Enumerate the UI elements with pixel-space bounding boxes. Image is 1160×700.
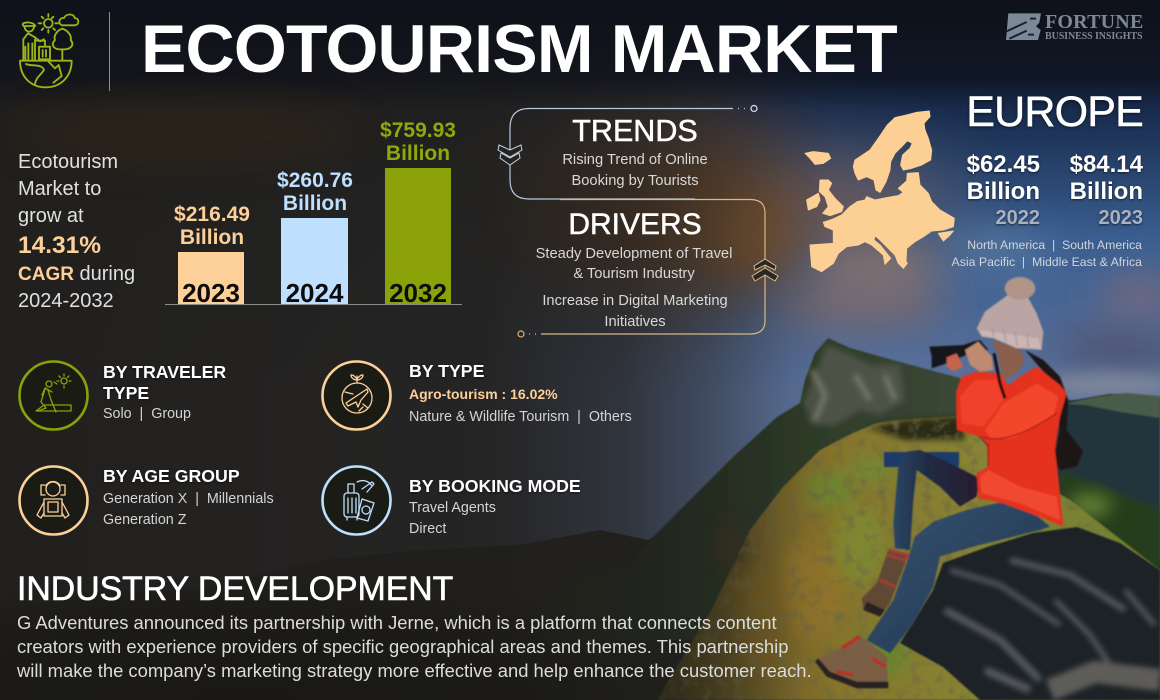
value label 2023 bbox=[174, 203, 250, 248]
drivers text: travel and tourism development: Steady Development of Travel bbox=[536, 246, 732, 262]
logo icon: globe with hiker, tree, sun and cloud bbox=[19, 13, 80, 88]
drivers heading: DRIVERS bbox=[568, 208, 702, 241]
drivers text: digital marketing: Initiatives bbox=[604, 314, 666, 330]
header divider bbox=[108, 12, 110, 91]
chart baseline bbox=[165, 304, 462, 305]
panel: drivers bbox=[517, 198, 779, 338]
value label 2032 bbox=[380, 119, 456, 164]
value 2022 bbox=[966, 151, 1040, 229]
categories: Generation X | Millennials bbox=[103, 491, 274, 507]
heading: INDUSTRY DEVELOPMENT bbox=[17, 570, 453, 608]
value label 2032: Billion bbox=[386, 142, 450, 164]
bar chart bbox=[165, 119, 462, 308]
other regions bbox=[952, 238, 1142, 269]
upper body bbox=[929, 277, 1083, 527]
panel: Europe region bbox=[804, 88, 1144, 272]
CAGR statement: Ecotourism bbox=[18, 151, 118, 173]
categories: Nature & Wildlife Tourism | Others bbox=[409, 409, 632, 425]
drivers text: digital marketing bbox=[542, 293, 728, 330]
value label 2024: Billion bbox=[283, 192, 347, 214]
icon: hiker with sun bbox=[18, 360, 89, 431]
categories: Generation Z bbox=[103, 512, 186, 528]
segment: by type bbox=[321, 360, 632, 431]
bar 2023: 2023 bbox=[182, 278, 240, 308]
CAGR statement: grow at bbox=[18, 205, 84, 227]
CAGR statement: CAGR during bbox=[18, 263, 135, 285]
drivers text: travel and tourism development: & Tourism Industry bbox=[573, 266, 695, 282]
value 2022: Billion bbox=[967, 178, 1040, 205]
value label 2032: $759.93 bbox=[380, 119, 456, 142]
camera strap bbox=[994, 353, 1005, 398]
panel: trends bbox=[498, 104, 758, 200]
logo: Fortune Business Insights bbox=[1006, 11, 1143, 42]
CAGR statement: 2024-2032 bbox=[18, 290, 114, 312]
icon: globe with plane and sprout bbox=[321, 360, 392, 431]
heading: BY AGE GROUP bbox=[103, 466, 240, 486]
value 2022: $62.45 bbox=[967, 151, 1040, 178]
right forested slope bbox=[1060, 470, 1160, 600]
logo subtitle: BUSINESS INSIGHTS bbox=[1045, 31, 1143, 42]
CAGR statement: Market to bbox=[18, 178, 101, 200]
categories: Direct bbox=[409, 521, 446, 537]
CAGR statement bbox=[18, 151, 135, 312]
clouds bbox=[480, 110, 940, 310]
title: ECOTOURISM MARKET bbox=[141, 11, 897, 87]
jacket bbox=[956, 367, 1067, 527]
panel: industry development bbox=[17, 570, 812, 681]
value 2022: 2022 bbox=[996, 207, 1040, 229]
categories bbox=[103, 491, 274, 528]
value label 2024 bbox=[277, 169, 353, 214]
body text bbox=[17, 612, 812, 681]
hat bbox=[977, 293, 1043, 350]
logo wordmark: FORTUNE bbox=[1045, 11, 1143, 33]
value label 2023: $216.49 bbox=[174, 203, 250, 226]
value 2023: $84.14 bbox=[1070, 151, 1143, 178]
heading: BY TRAVELER bbox=[103, 362, 226, 382]
body text: creators with experience providers of specific geographical areas and themes. This partnership bbox=[17, 636, 788, 657]
other regions: North America | South America bbox=[967, 238, 1142, 252]
trends text: Booking by Tourists bbox=[571, 173, 699, 189]
bar 2023 bbox=[178, 252, 244, 304]
logo mark bbox=[1006, 13, 1041, 40]
value label 2024: $260.76 bbox=[277, 169, 353, 192]
value 2023: Billion bbox=[1070, 178, 1143, 205]
other regions: Asia Pacific | Middle East & Africa bbox=[952, 255, 1142, 269]
heading bbox=[103, 362, 226, 403]
region heading: EUROPE bbox=[966, 88, 1143, 136]
photographer bbox=[815, 277, 1083, 688]
CAGR statement: 14.31% bbox=[18, 232, 101, 259]
heading: TYPE bbox=[103, 383, 149, 403]
bar 2032 bbox=[385, 168, 451, 304]
drivers text: travel and tourism development bbox=[536, 246, 732, 282]
front boot bbox=[815, 635, 888, 688]
bar 2032: 2032 bbox=[389, 278, 447, 308]
heading: BY TYPE bbox=[409, 361, 484, 381]
hair bbox=[1025, 350, 1083, 470]
body text: G Adventures announced its partnership with Jerne, which is a platform that connects content bbox=[17, 612, 777, 633]
value 2023 bbox=[1069, 151, 1144, 229]
camera bbox=[929, 340, 988, 368]
categories: Travel Agents bbox=[409, 500, 496, 516]
drivers text: digital marketing: Increase in Digital Marketing bbox=[542, 293, 728, 309]
trends text bbox=[562, 152, 708, 189]
categories bbox=[409, 500, 496, 537]
back boot bbox=[862, 550, 908, 617]
segment: by booking mode bbox=[321, 465, 581, 537]
segment: by traveler type bbox=[18, 360, 226, 431]
icon: Europe map bbox=[804, 110, 955, 272]
icon: backpacker bbox=[18, 465, 89, 536]
drivers frame with arrows bbox=[517, 198, 779, 338]
grassy ridge bbox=[657, 416, 1160, 700]
front leg bbox=[867, 502, 1050, 653]
mountain peak bbox=[540, 338, 1000, 640]
value label 2023: Billion bbox=[180, 226, 244, 248]
trends frame with arrows bbox=[498, 104, 758, 200]
trends heading: TRENDS bbox=[572, 114, 698, 148]
bar 2024: 2024 bbox=[286, 278, 343, 308]
body text: will make the company’s marketing strategy more effective and help enhance the customer reach. bbox=[17, 660, 812, 681]
back leg bbox=[815, 450, 1050, 688]
trends text: Rising Trend of Online bbox=[562, 152, 708, 168]
segment: by age group bbox=[18, 465, 274, 536]
bar 2024 bbox=[281, 218, 348, 304]
far mountains bbox=[0, 470, 1160, 700]
icon: suitcase and passport bbox=[321, 465, 392, 536]
rock bbox=[900, 527, 1160, 700]
small blue mat bbox=[884, 452, 959, 467]
face bbox=[992, 340, 1025, 380]
categories: Solo | Group bbox=[103, 406, 191, 422]
heading: BY BOOKING MODE bbox=[409, 476, 581, 496]
value 2023: 2023 bbox=[1098, 207, 1143, 229]
highlighted share: Agro-tourism : 16.02% bbox=[409, 386, 558, 402]
hands bbox=[947, 353, 963, 372]
